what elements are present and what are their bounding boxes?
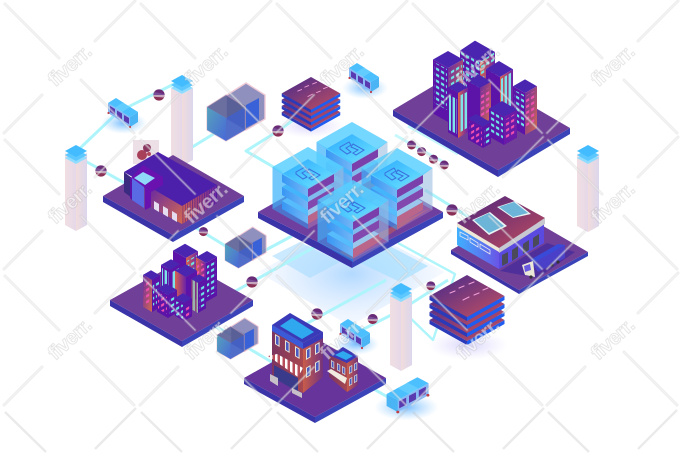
pillar: far left <box>65 145 87 231</box>
data rack lower centre <box>333 319 379 355</box>
pillar: far right <box>577 145 599 232</box>
panel: factory <box>103 140 244 242</box>
floor glow under central hub <box>258 114 508 360</box>
fiverr watermarks: fiverr. <box>316 179 368 229</box>
servers <box>272 122 432 262</box>
platform <box>103 155 244 242</box>
fiverr watermarks: fiverr. <box>44 315 96 365</box>
buildings <box>433 41 537 148</box>
panel: city left <box>110 244 253 347</box>
glass cube middle <box>225 227 266 268</box>
buildings <box>143 244 217 321</box>
fiverr watermarks: fiverr. <box>587 315 639 365</box>
panel: central hub <box>258 122 443 268</box>
data rack bottom <box>374 377 438 420</box>
connector lines <box>75 80 484 403</box>
small brick building <box>327 347 358 392</box>
large brick building <box>268 313 323 398</box>
fiverr watermarks: fiverr. <box>452 179 504 229</box>
chimney panel <box>133 140 159 164</box>
panel: city top right <box>393 41 570 177</box>
fiverr watermarks: fiverr. <box>452 41 504 91</box>
fiverr watermarks: fiverr. <box>316 315 368 365</box>
pillars <box>65 75 599 371</box>
layered stack top <box>282 77 340 132</box>
data rack top <box>342 63 388 99</box>
fiverr watermarks: fiverr. <box>587 179 639 229</box>
layered stack lower right <box>430 275 504 345</box>
panel: shops <box>244 313 386 423</box>
fiverr watermarks: fiverr. <box>44 41 96 91</box>
fiverr watermarks: fiverr. <box>587 41 639 91</box>
fiverr watermarks: fiverr. <box>180 41 232 91</box>
pillar: upper left <box>171 75 193 166</box>
fiverr watermarks: fiverr. <box>180 315 232 365</box>
warehouse building <box>457 196 575 278</box>
connector nodes <box>94 88 459 326</box>
fiverr watermarks: fiverr. <box>316 41 368 91</box>
platform <box>110 260 253 347</box>
glass cube upper <box>207 83 265 141</box>
fiverr watermarks: fiverr. <box>180 179 232 229</box>
platform <box>393 67 570 177</box>
fiverr watermarks: fiverr. <box>452 315 504 365</box>
factory building <box>124 152 217 224</box>
truck <box>522 244 565 279</box>
platform <box>451 212 588 294</box>
fiverr watermarks: fiverr. <box>44 179 96 229</box>
platform <box>258 160 443 268</box>
platform <box>244 338 386 423</box>
pillar: lower centre <box>390 283 412 371</box>
data rack upper left <box>101 98 147 134</box>
glass cube lower <box>217 318 258 359</box>
panel: warehouse <box>451 196 588 294</box>
